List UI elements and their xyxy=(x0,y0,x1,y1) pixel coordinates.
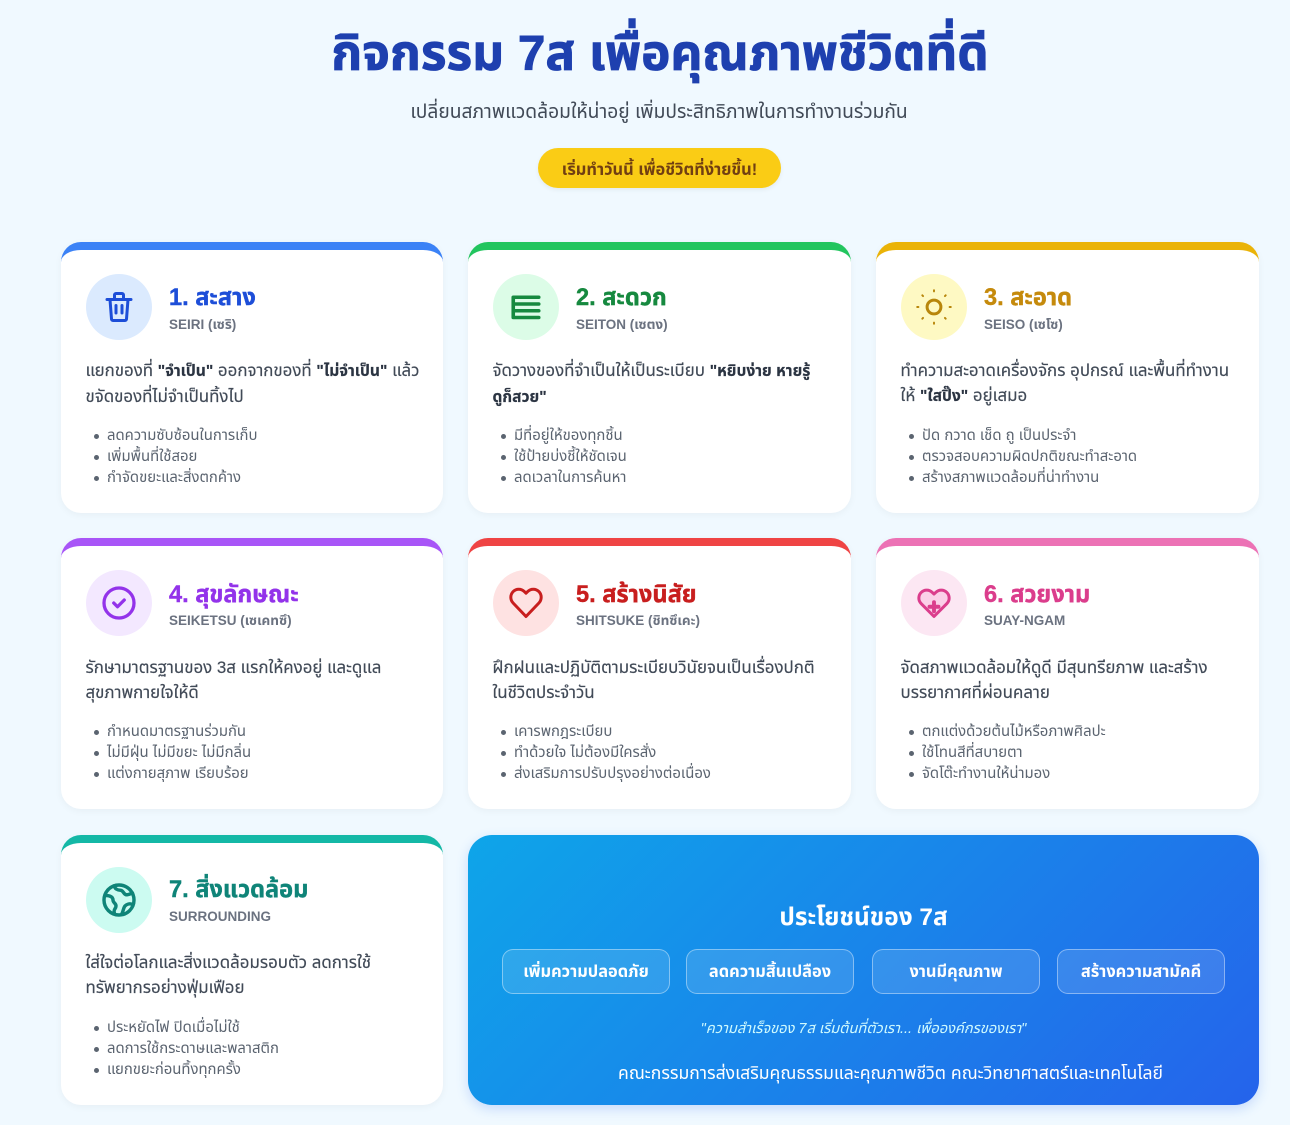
description: ทรัพยากรอย่างฟุ่มเฟือย xyxy=(86,978,244,997)
benefit: reduce waste: ลดความสิ้นเปลือง xyxy=(709,963,831,981)
panel: card 3 xyxy=(876,242,1259,513)
description: ใส่ใจต่อโลกและสิ่งแวดล้อมรอบตัว ลดการใช้ xyxy=(86,953,371,972)
description xyxy=(86,358,419,406)
subheading: SEIKETSU (เซเคทซึ) xyxy=(169,613,292,628)
description: บรรยากาศที่ผ่อนคลาย xyxy=(900,683,1050,702)
heading: 7. สิ่งแวดล้อม xyxy=(169,877,308,903)
bullet list: มีที่อยู่ให้ของทุกชิ้น xyxy=(514,428,623,444)
bullet list: ทำด้วยใจ ไม่ต้องมีใครสั่ง xyxy=(514,745,656,761)
subheading: SHITSUKE (ชิทซึเคะ) xyxy=(576,613,700,628)
bullet list xyxy=(94,723,251,782)
bullet list: แต่งกายสุภาพ เรียบร้อย xyxy=(107,766,249,782)
panel: card 7 xyxy=(61,835,443,1105)
benefit: unity: สร้างความสามัคคี xyxy=(1081,963,1201,981)
bullet list: ใช้ป้ายบ่งชี้ให้ชัดเจน xyxy=(514,449,627,465)
description xyxy=(86,658,381,703)
slogan pill: เริ่มทำวันนี้ เพื่อชีวิตที่ง่ายขึ้น! xyxy=(562,161,757,179)
panel: card 4 xyxy=(61,538,443,809)
heading: 5. สร้างนิสัย xyxy=(576,582,697,608)
bullet list: ปัด กวาด เช็ด ถู เป็นประจำ xyxy=(922,428,1076,444)
slogan pill xyxy=(538,148,781,188)
description: ให้ "ใสปิ๊ง" อยู่เสมอ xyxy=(900,386,1027,405)
icon: sun xyxy=(901,274,967,340)
description xyxy=(492,656,815,702)
description xyxy=(492,358,810,406)
benefit: unity xyxy=(1057,949,1225,994)
bullet list: จัดโต๊ะทำงานให้น่ามอง xyxy=(922,766,1050,782)
panel: card 2 xyxy=(468,242,851,513)
heading: 6. สวยงาม xyxy=(984,582,1090,608)
description: ในชีวิตประจำวัน xyxy=(492,683,595,702)
icon: heart xyxy=(493,570,559,636)
description: แยกของที่ "จำเป็น" ออกจากของที่ "ไม่จำเป็น" แล้ว xyxy=(86,361,419,380)
footer credit: คณะกรรมการส่งเสริมคุณธรรมและคุณภาพชีวิต คณะวิทยาศาสตร์และเทคโนโลยี xyxy=(618,1063,1163,1083)
panel: card 5 xyxy=(468,538,851,809)
icon: trash xyxy=(86,274,152,340)
subheading: SURROUNDING xyxy=(169,909,271,924)
subheading: SEITON (เซตง) xyxy=(576,317,668,332)
bullet list: ลดความซับซ้อนในการเก็บ xyxy=(107,428,257,444)
bullet list xyxy=(909,427,1137,486)
bullet list: ไม่มีฝุ่น ไม่มีขยะ ไม่มีกลิ่น xyxy=(107,745,251,761)
title: กิจกรรม 7ส เพื่อคุณภาพชีวิตที่ดี xyxy=(331,26,989,81)
icon: list xyxy=(493,274,559,340)
benefit: quality: งานมีคุณภาพ xyxy=(909,963,1003,981)
bullet list: กำจัดขยะและสิ่งตกค้าง xyxy=(107,470,241,486)
heading: 3. สะอาด xyxy=(984,285,1072,311)
bullet list: กำหนดมาตรฐานร่วมกัน xyxy=(107,724,246,740)
description: จัดวางของที่จำเป็นให้เป็นระเบียบ "หยิบง่าย หายรู้ xyxy=(492,361,810,380)
panel: card 1 xyxy=(61,242,443,513)
panel: card 6 xyxy=(876,538,1259,809)
icon: heart with plus xyxy=(901,570,967,636)
heading: 1. สะสาง xyxy=(169,285,256,311)
bullet list: แยกขยะก่อนทิ้งทุกครั้ง xyxy=(107,1062,241,1078)
bullet list: ส่งเสริมการปรับปรุงอย่างต่อเนื่อง xyxy=(514,766,711,782)
bullet list: เพิ่มพื้นที่ใช้สอย xyxy=(107,449,197,465)
bullet list: ประหยัดไฟ ปิดเมื่อไม่ใช้ xyxy=(107,1020,240,1036)
description: รักษามาตรฐานของ 3ส แรกให้คงอยู่ และดูแล xyxy=(86,658,381,677)
icon: check circle xyxy=(86,570,152,636)
bullet list: ใช้โทนสีที่สบายตา xyxy=(922,745,1023,761)
description: ฝึกฝนและปฏิบัติตามระเบียบวินัยจนเป็นเรื่องปกติ xyxy=(492,658,815,677)
description: ดูก็สวย" xyxy=(492,389,547,406)
panel: benefits xyxy=(468,835,1259,1105)
bullet list: ลดเวลาในการค้นหา xyxy=(514,470,626,486)
subheading: SUAY-NGAM xyxy=(984,613,1065,628)
subheading: SEISO (เซโซ) xyxy=(984,317,1063,332)
benefits heading: ประโยชน์ของ 7ส xyxy=(779,904,948,931)
bullet list: เคารพกฎระเบียบ xyxy=(514,724,612,740)
benefit: safety xyxy=(502,949,670,994)
bullet list: ลดการใช้กระดาษและพลาสติก xyxy=(107,1041,279,1057)
bullet list: ตรวจสอบความผิดปกติขณะทำสะอาด xyxy=(922,449,1137,465)
description xyxy=(900,658,1208,702)
subtitle: เปลี่ยนสภาพแวดล้อมให้น่าอยู่ เพิ่มประสิทธิภาพในการทำงานร่วมกัน xyxy=(410,102,908,123)
bullet list xyxy=(94,1016,279,1078)
heading: 4. สุขลักษณะ xyxy=(169,582,299,608)
bullet list xyxy=(909,723,1106,782)
heading: 2. สะดวก xyxy=(576,285,667,311)
benefit: quality xyxy=(872,949,1040,994)
bullet list xyxy=(501,724,711,782)
description xyxy=(900,358,1229,406)
icon: globe xyxy=(86,867,152,933)
benefit: safety: เพิ่มความปลอดภัย xyxy=(523,963,649,981)
benefit: reduce waste xyxy=(686,949,854,994)
subheading: SEIRI (เซริ) xyxy=(169,317,236,332)
bullet list xyxy=(94,427,257,486)
description: จัดสภาพแวดล้อมให้ดูดี มีสุนทรียภาพ และสร้าง xyxy=(900,658,1208,677)
quote: "ความสำเร็จของ 7ส เริ่มต้นที่ตัวเรา... เพื่อองค์กรของเรา" xyxy=(701,1021,1026,1037)
description: ขจัดของที่ไม่จำเป็นทิ้งไป xyxy=(86,387,244,406)
description xyxy=(86,952,371,998)
bullet list xyxy=(501,424,627,486)
description: ทำความสะอาดเครื่องจักร อุปกรณ์ และพื้นที่ทำงาน xyxy=(900,361,1229,380)
bullet list: ตกแต่งด้วยต้นไม้หรือภาพศิลปะ xyxy=(922,724,1106,740)
bullet list: สร้างสภาพแวดล้อมที่น่าทำงาน xyxy=(922,470,1099,486)
description: สุขภาพกายใจให้ดี xyxy=(86,683,199,702)
